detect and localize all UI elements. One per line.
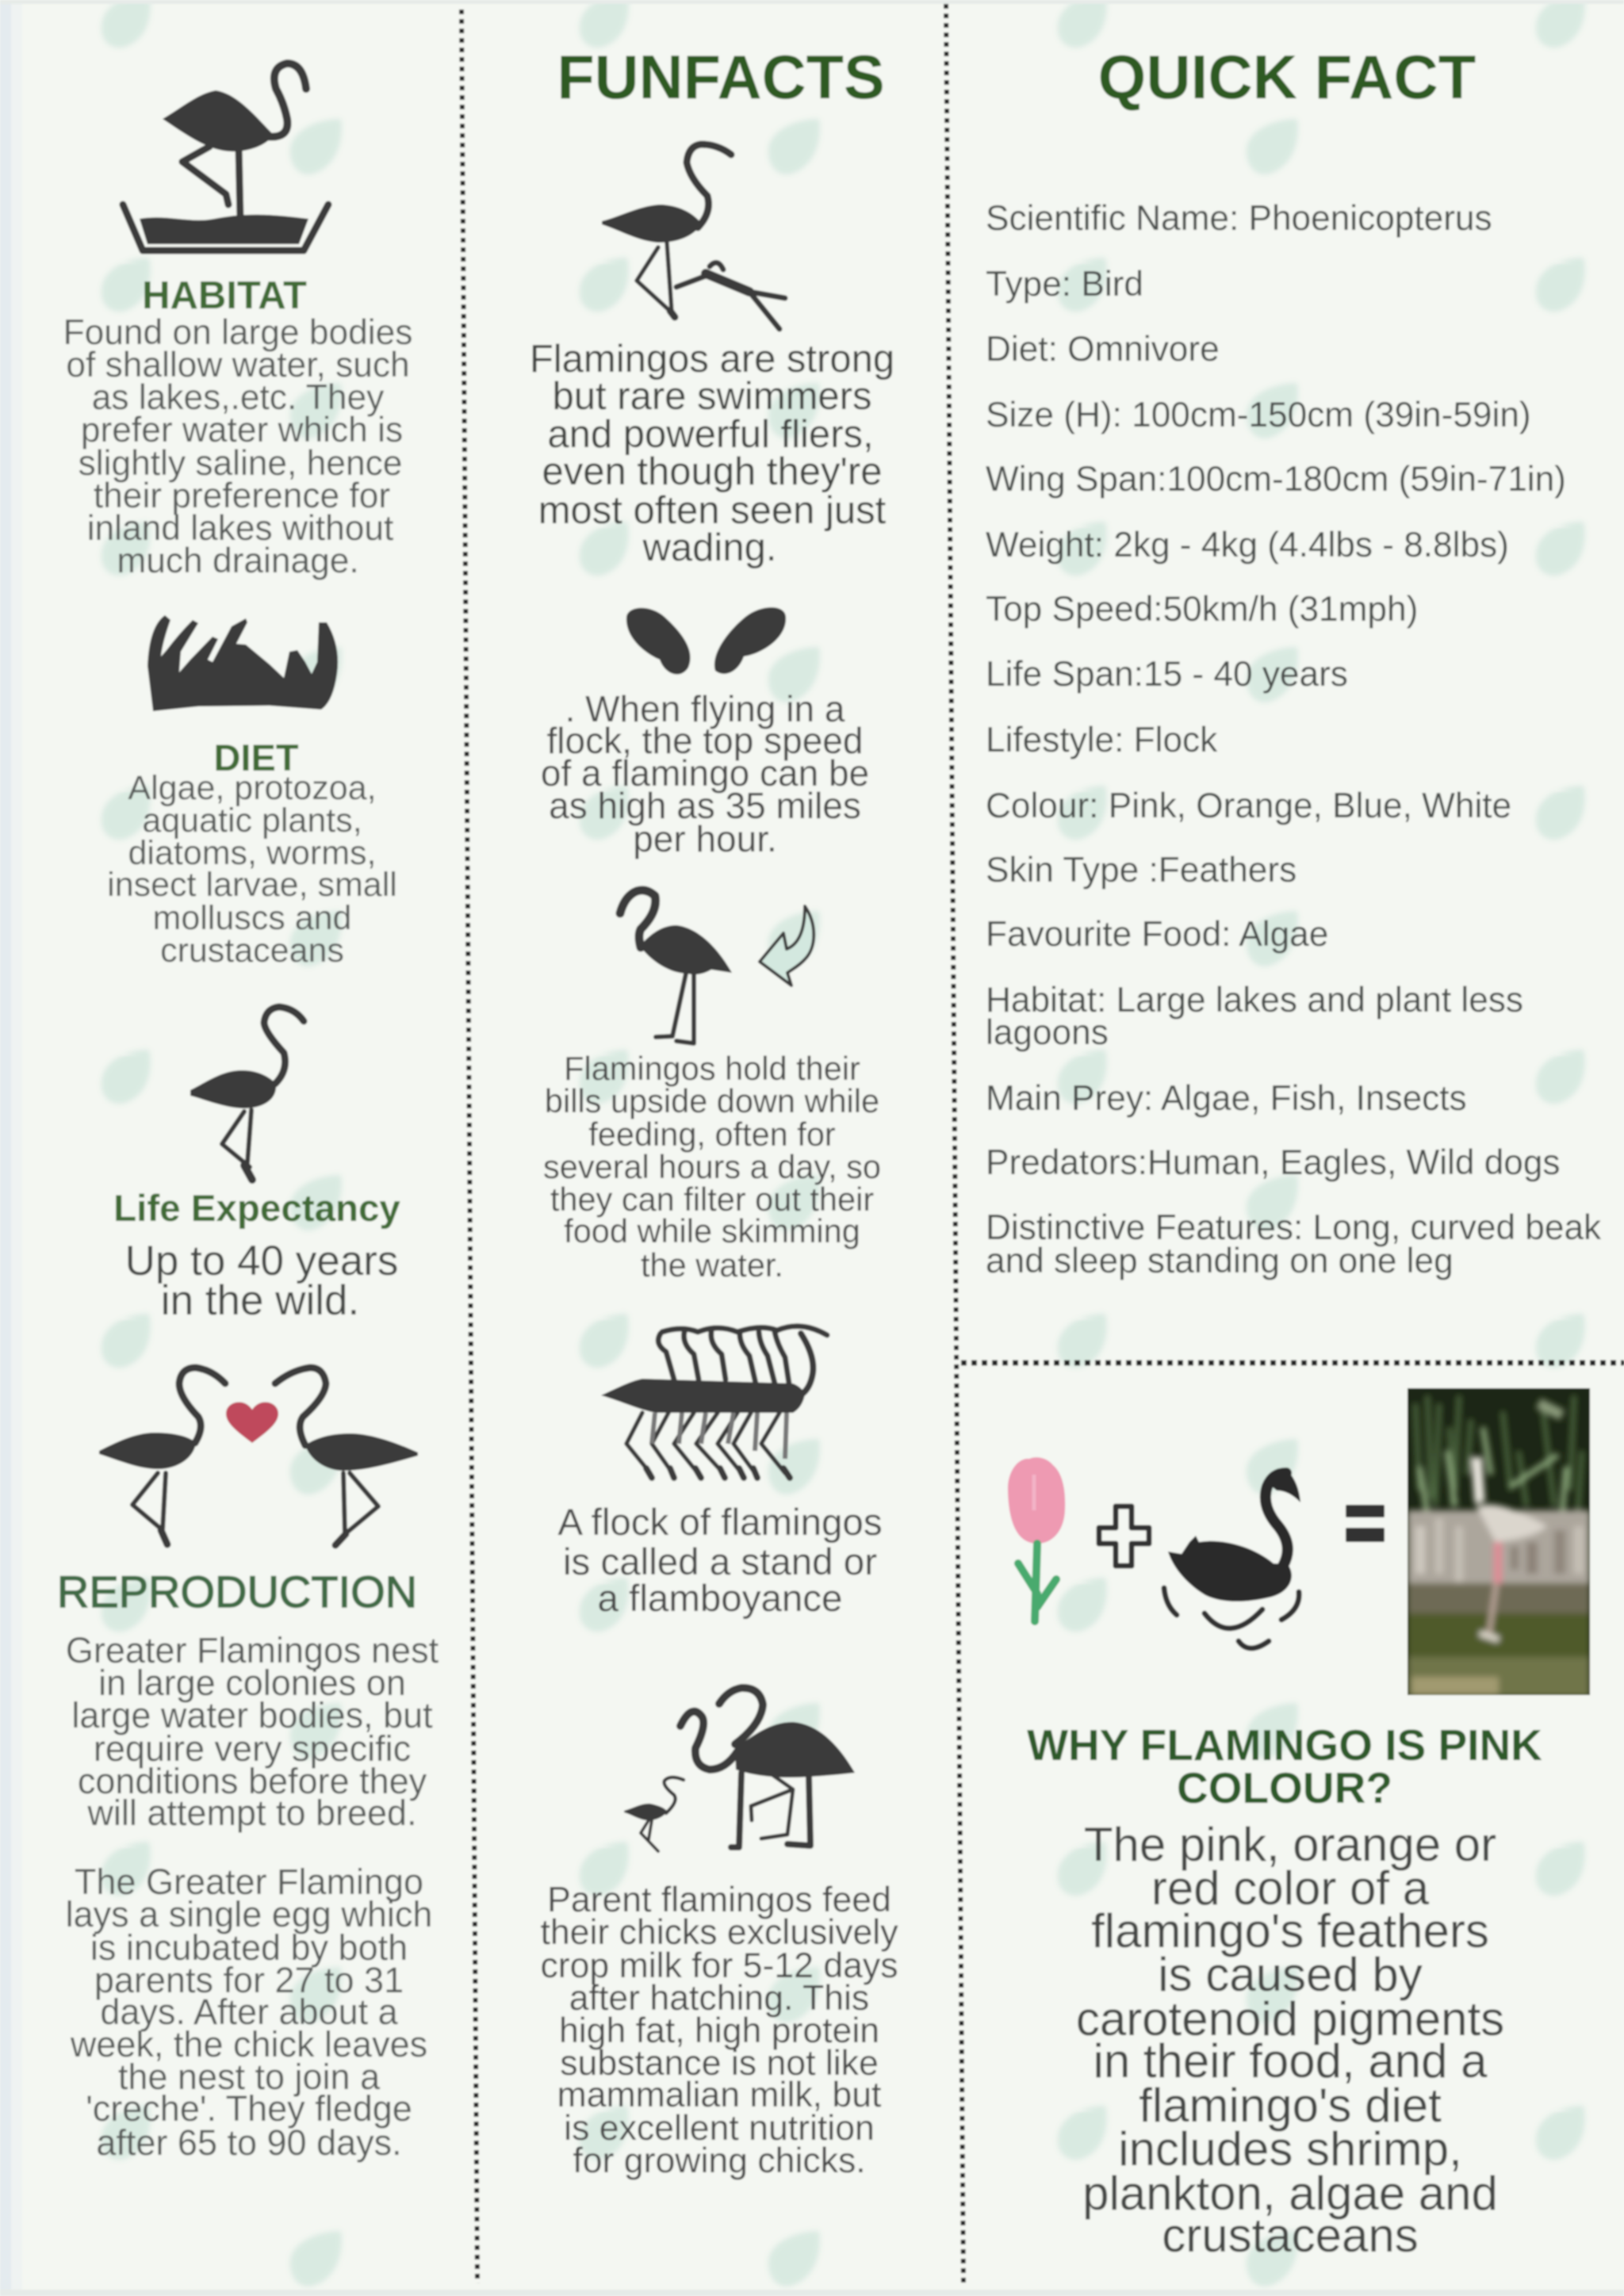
text: fun fact speed [541, 688, 869, 859]
text: fun fact feeding: Flamingos hold their [564, 1050, 860, 1087]
text: pink explanation: includes shrimp, [1118, 2122, 1462, 2175]
text: quick fact list: Habitat: Large lakes and plant less [986, 981, 1523, 1020]
text: pink explanation: plankton, algae and [1082, 2167, 1498, 2220]
text: quick fact list: Distinctive Features: Long, curved beak [986, 1208, 1602, 1247]
text: quick fact list: Top Speed:50km/h (31mph) [986, 590, 1418, 629]
heading: reproduction: REPRODUCTION [57, 1567, 417, 1617]
text: reproduction paragraph two [66, 1862, 432, 2163]
text: fun fact crop milk: high fat, high protein [559, 2011, 879, 2050]
icon: black swan [1164, 1470, 1300, 1648]
heading: why flamingo is pink [1027, 1720, 1542, 1812]
text: fun fact feeding: bills upside down while [545, 1082, 879, 1119]
text: quick fact list: Size (H): 100cm-150cm (39in-59in) [986, 396, 1531, 434]
heading: quick fact: QUICK FACT [1098, 42, 1476, 112]
text: fun fact crop milk: after hatching. This [569, 1979, 869, 2018]
text: fun fact crop milk: crop milk for 5-12 days [540, 1946, 898, 1985]
text: reproduction paragraph two: week, the chick leaves [70, 2024, 427, 2064]
text: diet body: aquatic plants, [142, 802, 362, 840]
photo: flamingo by a wall [1408, 1388, 1590, 1697]
text: pink explanation: flamingo's feathers [1091, 1904, 1489, 1957]
text: reproduction paragraph one: in large colonies on [98, 1663, 406, 1703]
text: reproduction paragraph two: lays a single egg which [66, 1894, 432, 1934]
text: fun fact feeding: feeding, often for [588, 1115, 836, 1153]
text: life expectancy value: in the wild. [161, 1277, 359, 1324]
text: pink explanation: crustaceans [1162, 2209, 1419, 2262]
text: reproduction paragraph two: days. After about a [100, 1992, 399, 2032]
text: quick fact list: Type: Bird [986, 265, 1143, 304]
text: quick fact list: Favourite Food: Algae [986, 915, 1328, 954]
text: fun fact speed: of a flamingo can be [541, 752, 869, 794]
text: fun fact flock: a flamboyance [598, 1578, 842, 1620]
text: diet body: insect larvae, small [107, 866, 397, 904]
heading: life expectancy: Life Expectancy [113, 1188, 400, 1230]
text: fun fact flock: is called a stand or [563, 1541, 877, 1583]
text: fun fact feeding: food while skimming [564, 1212, 860, 1249]
text: fun fact feeding: the water. [641, 1246, 783, 1284]
text: habitat body [63, 313, 412, 580]
text: fun fact speed: as high as 35 miles [549, 785, 861, 826]
icon: parent flamingo with chick [624, 1688, 855, 1851]
text: reproduction paragraph one: will attempt to breed. [86, 1793, 417, 1833]
text: habitat body: as lakes,.etc. They [92, 378, 385, 417]
text: fun fact swimmers: wading. [642, 526, 776, 569]
text: reproduction paragraph two: 'creche'. They fledge [86, 2088, 412, 2129]
heading: why flamingo is pink: COLOUR? [1177, 1763, 1392, 1812]
text: diet body: Algae, protozoa, [128, 769, 377, 807]
text: fun fact crop milk: for growing chicks. [573, 2141, 866, 2180]
heading: why flamingo is pink: WHY FLAMINGO IS PINK [1027, 1720, 1542, 1770]
text: reproduction paragraph one: conditions before they [78, 1761, 427, 1801]
text: life expectancy value: Up to 40 years [125, 1238, 398, 1284]
text: fun fact flock: A flock of flamingos [557, 1502, 883, 1544]
text: fun fact speed: flock, the top speed [547, 720, 863, 761]
text: fun fact swimmers: Flamingos are strong [530, 338, 894, 381]
text: quick fact list: Diet: Omnivore [986, 330, 1220, 369]
text: diet body: molluscs and [153, 899, 351, 937]
text: fun fact swimmers [530, 338, 894, 569]
icon: flamingo with frog-like swimmer [602, 144, 785, 329]
text: habitat body: inland lakes without [87, 509, 393, 548]
text: quick fact list: Life Span:15 - 40 years [986, 655, 1348, 694]
text: habitat body: of shallow water, such [66, 346, 410, 385]
heading: habitat: HABITAT [142, 274, 307, 317]
text: fun fact crop milk: mammalian milk, but [557, 2076, 882, 2114]
text: habitat body: much drainage. [117, 541, 359, 580]
text: fun fact swimmers: most often seen just [538, 489, 887, 532]
text: quick fact list: and sleep standing on one leg [986, 1242, 1454, 1280]
icon: flamingo standing in nest [123, 63, 328, 251]
text: fun fact crop milk: their chicks exclusively [540, 1913, 898, 1952]
text: quick fact list: lagoons [986, 1013, 1109, 1052]
text: diet body: diatoms, worms, [128, 834, 377, 872]
text: fun fact flock [557, 1502, 883, 1620]
icon: flock of flamingos [601, 1326, 827, 1478]
text: reproduction paragraph two: parents for 27 to 31 [94, 1960, 404, 2000]
text: habitat body: Found on large bodies [63, 313, 412, 352]
text: quick fact list: Main Prey: Algae, Fish, Insects [986, 1079, 1467, 1118]
text: fun fact crop milk: substance is not like [560, 2044, 879, 2083]
text: habitat body: slightly saline, hence [79, 444, 402, 483]
text: pink explanation: in their food, and a [1093, 2034, 1488, 2087]
text: quick fact list [986, 199, 1602, 1280]
text: reproduction paragraph one: require very specific [94, 1728, 411, 1769]
text: reproduction paragraph two: the nest to join a [118, 2057, 381, 2097]
text: quick fact list: Wing Span:100cm-180cm (59in-71in) [986, 460, 1566, 499]
text: fun fact swimmers: but rare swimmers [553, 375, 871, 418]
text: pink explanation: flamingo's diet [1139, 2079, 1442, 2132]
text: reproduction paragraph one: large water bodies, but [71, 1695, 433, 1735]
text: fun fact crop milk: is excellent nutrition [564, 2109, 875, 2148]
text: diet body: crustaceans [160, 932, 344, 970]
text: habitat body: prefer water which is [81, 411, 403, 450]
text: quick fact list: Colour: Pink, Orange, Blue, White [986, 786, 1511, 825]
icon: flamingo feeding [620, 890, 732, 1043]
text: quick fact list: Lifestyle: Flock [986, 721, 1218, 760]
heading: diet: DIET [213, 737, 299, 779]
icon: flamingo life expectancy [190, 1007, 304, 1180]
text: diet body [107, 769, 397, 970]
text: reproduction paragraph two: after 65 to 90 days. [96, 2122, 402, 2163]
text: reproduction paragraph one: Greater Flamingos nest [66, 1630, 439, 1670]
text: pink explanation: The pink, orange or [1084, 1818, 1496, 1871]
panel: left column [57, 63, 439, 2163]
text: quick fact list: Predators:Human, Eagles, Wild dogs [986, 1143, 1561, 1182]
text: fun fact crop milk [540, 1881, 898, 2180]
text: reproduction paragraph one [66, 1630, 439, 1833]
text: fun fact crop milk: Parent flamingos feed [547, 1881, 891, 1919]
icon: wings [626, 607, 786, 675]
text: pink explanation: is caused by [1158, 1948, 1423, 2001]
icon: curved arrow [760, 906, 814, 985]
text: quick fact list: Weight: 2kg - 4kg (4.4lbs - 8.8lbs) [986, 526, 1509, 564]
text: pink explanation [1076, 1818, 1504, 2262]
text: reproduction paragraph two: The Greater Flamingo [75, 1862, 423, 1902]
icon: pink flower [1008, 1457, 1065, 1621]
text: pink explanation: red color of a [1151, 1862, 1430, 1915]
text: fun fact feeding: they can filter out their [550, 1181, 874, 1218]
panel: why flamingo is pink [1008, 1388, 1590, 2262]
text: fun fact swimmers: and powerful fliers, [547, 413, 874, 456]
text: fun fact feeding [543, 1050, 881, 1284]
text: fun fact speed: per hour. [633, 818, 777, 859]
text: quick fact list: Skin Type :Feathers [986, 851, 1297, 890]
text: quick fact list: Scientific Name: Phoenicopterus [986, 199, 1492, 238]
icon: equals sign [1346, 1505, 1385, 1542]
panel: quick facts [986, 42, 1602, 1280]
text: pink explanation: carotenoid pigments [1076, 1992, 1504, 2045]
text: habitat body: their preference for [94, 476, 390, 515]
text: fun fact speed: . When flying in a [565, 688, 845, 729]
heading: funfacts: FUNFACTS [557, 44, 885, 112]
icon: plus sign [1099, 1506, 1149, 1566]
text: reproduction paragraph two: is incubated by both [90, 1927, 408, 1968]
panel: funfacts column [530, 44, 898, 2180]
text: fun fact feeding: several hours a day, so [543, 1148, 881, 1185]
text: fun fact swimmers: even though they're [542, 450, 882, 493]
text: life expectancy value [125, 1238, 398, 1324]
icon: two flamingos with heart [99, 1368, 418, 1545]
icon: grass and algae [147, 615, 338, 711]
